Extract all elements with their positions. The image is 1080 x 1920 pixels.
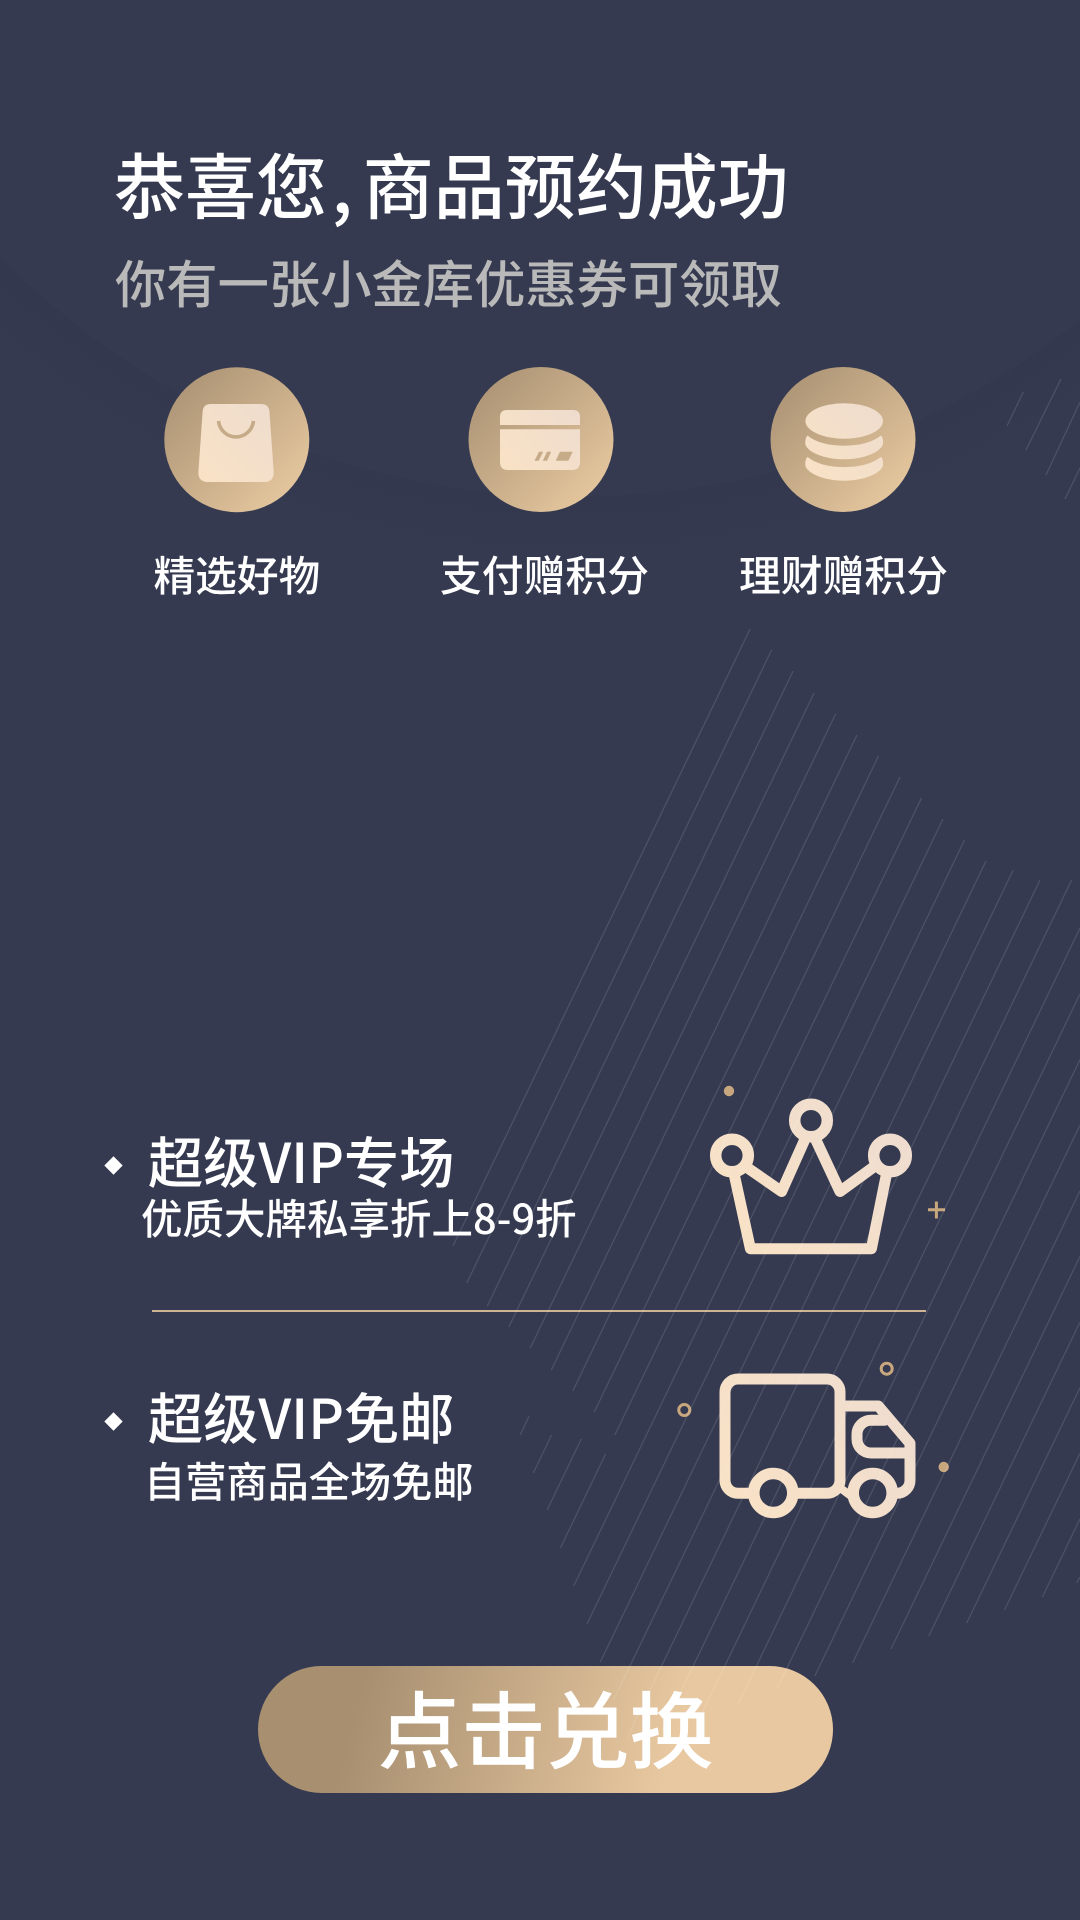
- label: wealth points: 理财赠积分: [739, 544, 948, 604]
- icon: delivery truck: [677, 1362, 949, 1518]
- text: VIP sale detail: 优质大牌私享折上8-9折: [141, 1186, 577, 1246]
- title: 恭喜您,商品预约成功: [114, 132, 789, 234]
- label: selected goods: 精选好物: [154, 544, 320, 604]
- text: free shipping detail: 自营商品全场免邮: [144, 1449, 474, 1509]
- icon: bank card: [468, 367, 614, 512]
- bullet: VIP sale: [104, 1156, 122, 1174]
- subtitle: 你有一张小金库优惠券可领取: [115, 243, 782, 318]
- icon: crown: [710, 1086, 945, 1254]
- button: redeem: 点击兑换: [377, 1666, 714, 1787]
- label: payment points: 支付赠积分: [440, 544, 649, 604]
- icon: coin stack: [770, 367, 916, 512]
- icon: shopping bag: [164, 367, 310, 512]
- heading: VIP sale: 超级VIP专场: [148, 1119, 454, 1199]
- bullet: free shipping: [104, 1412, 122, 1431]
- heading: free shipping: 超级VIP免邮: [148, 1375, 454, 1455]
- button: redeem: [258, 1666, 833, 1793]
- divider: [152, 1310, 926, 1312]
